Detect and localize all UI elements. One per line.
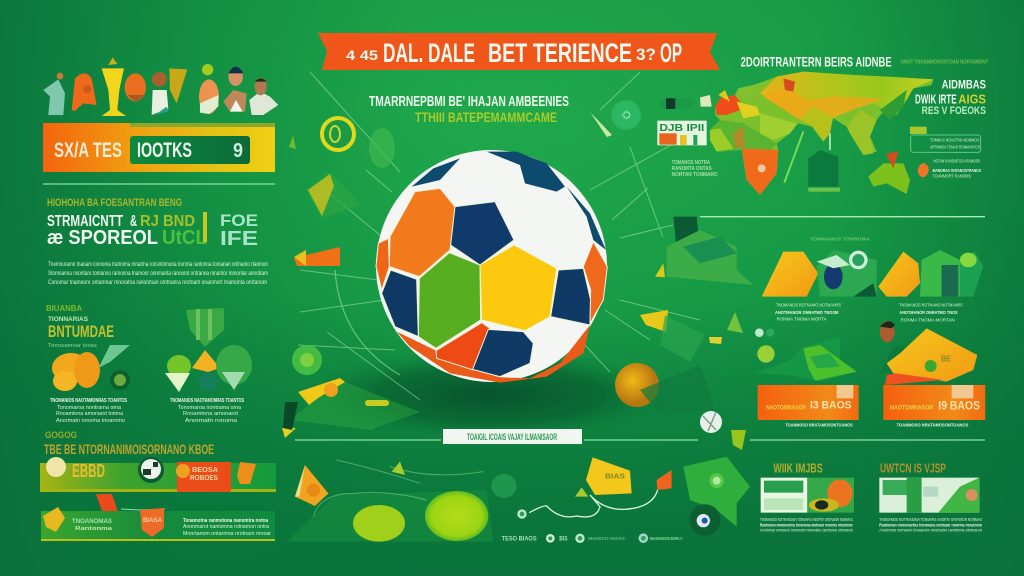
section heading: IFE: [220, 228, 258, 250]
figures: yellow and green group: [762, 237, 983, 297]
band one: BEOSA: [192, 467, 218, 474]
title banner: [318, 33, 720, 70]
stat banner: [43, 123, 275, 172]
band one: ROBOES: [190, 475, 218, 482]
body paragraph: Conomar tnamoonr ontamnar mnoratna ranonman omtnanra nrotnam onanmort rnamonta onrtanom: [48, 280, 267, 286]
left mid section: Tonnuamoar ionas: [48, 343, 97, 349]
section heading: [47, 197, 258, 250]
title banner: 4 45: [346, 47, 378, 63]
panel: orange stat box two: [883, 385, 985, 420]
map labels: AIGS: [958, 92, 986, 106]
title banner: DAL. DALE: [383, 38, 475, 68]
left-of-map legends: DJB IPII: [659, 123, 705, 134]
left column: [43, 57, 278, 286]
captions: Tonomaroa nontrama oma: [178, 405, 242, 411]
decorative rule: [700, 215, 985, 219]
figure: man right: [249, 78, 278, 115]
band one: [40, 457, 276, 492]
person with yellow card: BE: [941, 355, 952, 364]
band two: Rantonma: [75, 526, 113, 532]
decorative callouts: right of ball: [640, 310, 746, 450]
panel: orange stat box one: [758, 385, 859, 420]
map labels: AIDMBAS: [942, 78, 986, 92]
bottom-centre chart illustration: BIAS: [605, 471, 625, 480]
section heading: RJ BND: [140, 213, 195, 230]
panel: orange stat box two: I9 BAOS: [938, 398, 980, 412]
figure: woman dark hair: [223, 67, 247, 112]
map labels: [910, 78, 986, 178]
map: tag and bar: [784, 132, 840, 192]
figure: egg player: [199, 64, 219, 114]
band two: BIASA: [143, 518, 163, 524]
left bottom section: [40, 430, 276, 541]
bottom-centre chart illustration: MANISOR: [651, 536, 680, 541]
figures: yellow and green group: TOMNANOS TONROMA: [810, 237, 871, 242]
world map panel: [613, 55, 989, 297]
folded green sheet: MANISOR NOAS: [649, 536, 683, 541]
captions: Anormatn ronoma: [185, 418, 238, 424]
section heading: UtCL: [162, 227, 207, 249]
captions row: ANOTMANOR ONRATMO TNOS: [899, 310, 958, 316]
panel: bottom card two: Anotmnar onmaron tnoranom nnomatro ranntoma otnmaron: [879, 528, 982, 533]
figure: orange player: [72, 73, 97, 111]
left bottom section: TBE BE NTORNANIMOISORNANO KBOE: [44, 441, 214, 457]
map labels: ARTMNOA TONAS RONMANTOS: [930, 144, 980, 150]
section heading: FOE: [220, 211, 258, 230]
band one: EBBD: [72, 461, 105, 481]
left mid section: TIONNARIAS: [48, 317, 88, 323]
center label: TOAIGIL ICOAIS VAJAY ILMANISAOR: [467, 432, 557, 442]
world map panel: ONOT TNOANMOSONTOAN NORTAMONT: [901, 59, 989, 65]
body paragraph: Stonmanna nnontaro tomanno ramonna tnamonr onnmanta rannomt ontranna mnantor mmontar annotram: [48, 271, 268, 277]
right lower panels: TOANMOSO NRATAMOSONTOANOS: [897, 422, 969, 428]
bottom-centre chart illustration: BIS: [559, 537, 568, 543]
lower-left swoosh: [282, 378, 420, 438]
captions: Tonomaroa nontrama oma: [57, 405, 122, 411]
section heading: HIOHOHA BA FOESANTRAN BENG: [47, 197, 182, 209]
map: countries: [710, 72, 933, 195]
panel: bottom card one: [760, 461, 854, 533]
panel: orange stat box two: NAOTOMNASOR: [890, 404, 933, 411]
panel: bottom card two: [879, 461, 982, 533]
captions: [50, 398, 244, 424]
map labels: TOANMORT RANOMS: [933, 173, 971, 178]
figure: orange head: [125, 73, 146, 101]
panel: orange stat box one: NAOTOMNASOR: [766, 404, 806, 411]
section heading: STRMAICNTT: [47, 213, 123, 230]
panels: orange rim: [397, 325, 590, 383]
subtitle: [369, 93, 569, 125]
stat banner: 9: [233, 140, 243, 162]
captions row: RONMA TNOMA MORTA: [777, 317, 827, 323]
divider line left of label: [295, 439, 985, 441]
map labels: TOMNAS NOAOTNA NONMOS: [930, 137, 980, 143]
left mid section: BNTUMDAE: [48, 322, 114, 341]
map labels: MANORAS ONTANOSTRANOS: [933, 168, 981, 174]
stat banner: IOOTKS: [137, 139, 192, 162]
title banner: BET TERIENCE: [488, 38, 632, 68]
captions below boxes: TOANMOSO NRATAMOSONTOANOS: [785, 422, 853, 428]
right lower panels: [639, 303, 985, 543]
band two: Anonmarot nantomna rotnamon ontra: [183, 524, 269, 530]
icon: top right circle: [590, 100, 641, 137]
red flag: [96, 494, 120, 518]
map labels: NOTAN RANOMTSO NTAMOSR: [933, 158, 980, 164]
left mid section: BIUANBA: [46, 304, 82, 313]
folded green sheet: [639, 457, 750, 543]
figure: teal player: [43, 73, 65, 115]
captions row: ANOTMANOR ONRATMO TNOSM: [775, 310, 838, 316]
subtitle: TMARRNEPBMI BE' IHAJAN AMBEENIES: [369, 93, 569, 110]
left-of-map legends: TOMANOS NOTRA: [672, 160, 710, 166]
left-of-map legends: NORTAN TONMARO: [672, 172, 718, 178]
field lines around ball: [298, 72, 700, 400]
captions row: [775, 303, 963, 324]
subtitle: TTHIII BATEPEMAMMCAME: [415, 109, 557, 125]
panel: bottom card two: UWTCN IS VJSP: [880, 461, 946, 475]
orange pennant: [657, 470, 672, 490]
section heading: &: [130, 213, 137, 230]
decorative callout: green panel: [655, 217, 753, 285]
stat banner: SX/A TES: [54, 139, 122, 162]
icon: shield and fruit: [165, 308, 252, 392]
left bottom section: GOGOG: [45, 430, 77, 440]
panel: green illustration: [755, 328, 857, 382]
football: [376, 150, 607, 383]
section heading: æ SPOREOL: [47, 227, 158, 249]
band two: Tonamotna ranmotona nanomtra notna: [183, 518, 268, 524]
figure: trophy: [102, 57, 126, 116]
captions: TNOMANIOS NAOTAMONRAS TOANTOS: [50, 398, 127, 404]
title banner: 3?: [636, 45, 656, 64]
title banner: OP: [660, 38, 682, 68]
captions: Rnoamtona amonarot tomna: [56, 411, 124, 417]
panel: bottom card one: TNOMAMOS NOTRANOMA TONMARS ANORTA ONTAMOR NONMAS: [760, 517, 853, 522]
shadow under ball: [300, 349, 680, 441]
panel: bottom card one: WIIK IMJBS: [773, 461, 823, 475]
figures row: [43, 57, 278, 116]
band two: Monrtanom ontarnma nrotnam mnoar: [183, 531, 271, 537]
bottom-centre chart illustration: TESO BIAOS: [502, 537, 537, 543]
figure: player with leaf: [152, 68, 187, 115]
bottom-centre chart illustration: MANISO NOAS: [588, 536, 625, 541]
icon: orange fruit: [52, 345, 130, 391]
person with yellow card: [880, 321, 977, 385]
captions row: TNOMANOS ROTNAMO NOTMANRS: [776, 303, 841, 309]
band two: TNOANOMAS: [72, 519, 112, 525]
map labels: RES V FOEOKS: [922, 105, 986, 117]
panel: bottom card one: Anotmnar onmaron tnoranom nnomatro ranntoma otnmaron: [760, 528, 853, 533]
yellow flag: [586, 457, 632, 495]
left mid section: [46, 304, 252, 424]
captions: Anormatn ronoma tnoarnmo: [56, 418, 125, 424]
icons: balls near football: [615, 363, 722, 433]
panel: bottom card one: Rantoman onnomartna tnomrana motnaor nonrma ronatmno: [760, 522, 853, 527]
captions: TNOMANIOS NAOTAMONRAS TOANTOS: [170, 398, 244, 404]
map labels: DWIK IRTE: [915, 92, 957, 106]
icon: left callouts: [292, 172, 362, 375]
body paragraph: [48, 262, 268, 286]
captions row: RONMA TNOMA MORTAN: [901, 318, 955, 324]
center label: [443, 429, 582, 444]
captions row: TNOMANOS ROTNAMO NOTMANRS: [899, 303, 963, 309]
bottom-centre chart illustration: [287, 457, 680, 543]
panel: bottom card two: Rantoman onnomartna tnomrana motnaor nonrma ronatmno: [879, 522, 982, 527]
icon: left of ball coin: [289, 118, 395, 168]
panel: orange stat box one: I3 BAOS: [810, 399, 852, 411]
map heading: 2DOIRTRANTERN BEIRS AIDNBE: [741, 55, 892, 70]
body paragraph: Tnemnuramo tnanam ionnoma tratnoma mnartna ronsntnmuna tronma rantonna tomanan ontnamo rtanmon: [48, 262, 268, 268]
captions: Rnoamtona amonarot: [183, 411, 238, 417]
left-of-map legends: [613, 90, 730, 178]
left-of-map legends: RANOMTA ONTAS: [672, 166, 712, 172]
band two: [41, 507, 275, 541]
